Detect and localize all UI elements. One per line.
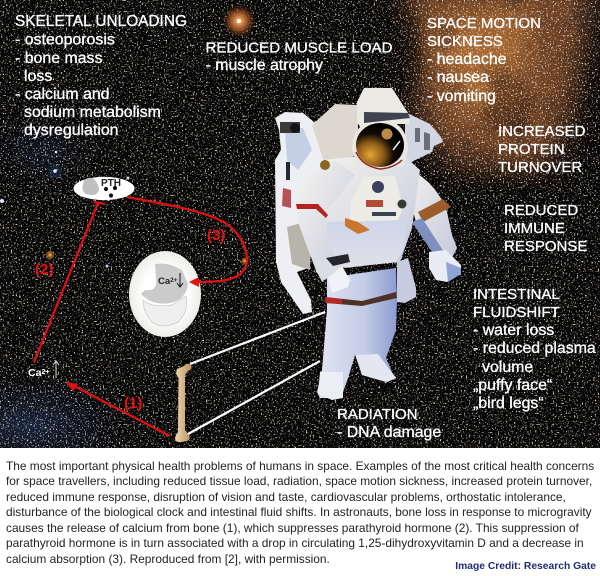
caption text: causes the release of calcium from bone (1), which suppresses parathyroid hormone (2). This suppression of (6, 521, 579, 535)
heading: increased protein turnover: INCREASED (498, 123, 586, 140)
heading: skeletal unloading: - calcium and (15, 86, 110, 103)
helmet (352, 88, 410, 172)
icon: PTH gland oval: PTH (101, 178, 121, 189)
arrow 2: (2) (35, 261, 53, 278)
caption text: calcium absorption (3). Reproduced from [2], with permission. (6, 552, 330, 566)
heading: intestinal fluid shift: - reduced plasma (473, 340, 596, 357)
icon: PTH gland oval (74, 177, 134, 200)
icon: stomach and intestine oval: Ca (158, 276, 170, 287)
heading: intestinal fluid shift: INTESTINAL (473, 286, 560, 303)
astronaut (275, 88, 461, 400)
torso (310, 152, 420, 268)
heading: reduced immune response: REDUCED (504, 202, 578, 219)
heading: skeletal unloading: - osteoporosis (15, 32, 115, 48)
legs (317, 268, 397, 398)
bone connector lines (188, 312, 325, 434)
icon: bone (175, 364, 192, 442)
arrow 1: (1) (124, 395, 142, 412)
space illustration (0, 0, 600, 448)
heading: radiation: - DNA damage (337, 424, 441, 441)
heading: reduced muscle load: - muscle atrophy (206, 57, 323, 74)
heading: increased protein turnover: PROTEIN (498, 141, 565, 158)
heading: reduced immune response: IMMUNE (504, 220, 565, 237)
heading: skeletal unloading: SKELETAL UNLOADING (15, 13, 187, 30)
heading: intestinal fluid shift: - water loss (473, 322, 554, 339)
heading: intestinal fluid shift: „puffy face“ (473, 377, 552, 394)
heading: intestinal fluid shift: „bird legs“ (473, 395, 544, 412)
heading: space motion sickness: - vomiting (427, 88, 496, 105)
caption text: parathyroid hormone is in turn associated with a drop in circulating 1,25-dihydroxyvitamin D and a decrease in (6, 536, 584, 550)
heading: intestinal fluid shift: FLUIDSHIFT (473, 304, 560, 321)
caption text: reduced immune response, disruption of vision and taste, cardiovascular problems, orthostatic intolerance, (6, 490, 566, 504)
right side pack (405, 112, 443, 165)
heading: space motion sickness: - nausea (427, 69, 489, 86)
image credit: Image Credit: Research Gate (455, 561, 596, 572)
icon: stomach and intestine oval: 2+ (170, 277, 178, 284)
heading: space motion sickness: - headache (427, 51, 507, 68)
label: calcium up: Ca (28, 367, 41, 379)
chest pack (350, 176, 403, 222)
glove box right (429, 250, 461, 282)
heading: radiation: RADIATION (337, 406, 418, 423)
arrow 2 (34, 202, 105, 362)
glove box left (327, 266, 350, 293)
caption text: disturbance of the biological clock and intestinal fluid shifts. In astronauts, bone loss in response to microgravity (6, 505, 592, 519)
caption text: for space travellers, including reduced tissue load, radiation, space motion sickness, increased protein turnover, (6, 474, 592, 488)
heading: intestinal fluid shift: volume (482, 359, 533, 376)
icon: stomach and intestine oval (129, 251, 201, 337)
caption text: The most important physical health problems of humans in space. Examples of the most critical health concerns (6, 459, 594, 473)
arrow 3: (3) (207, 227, 225, 244)
heading: skeletal unloading: loss (24, 68, 52, 85)
backpack (275, 104, 358, 314)
label: calcium up: 2+ (41, 369, 49, 376)
arm, far side (400, 165, 457, 258)
heading: increased protein turnover: TURNOVER (498, 159, 582, 176)
heading: skeletal unloading: sodium metabolism (24, 104, 161, 121)
heading: reduced immune response: RESPONSE (504, 238, 587, 255)
caption text (6, 459, 594, 566)
heading: skeletal unloading: - bone mass (15, 50, 102, 67)
heading: skeletal unloading: dysregulation (24, 122, 119, 139)
heading: reduced muscle load: REDUCED MUSCLE LOAD (206, 40, 393, 56)
heading: space motion sickness: SPACE MOTION (427, 15, 541, 32)
arm, near side (297, 160, 355, 282)
label: calcium up (28, 361, 59, 379)
heading: space motion sickness: SICKNESS (427, 33, 503, 50)
arrow 1 (66, 382, 170, 436)
arrow 3 (127, 197, 247, 287)
